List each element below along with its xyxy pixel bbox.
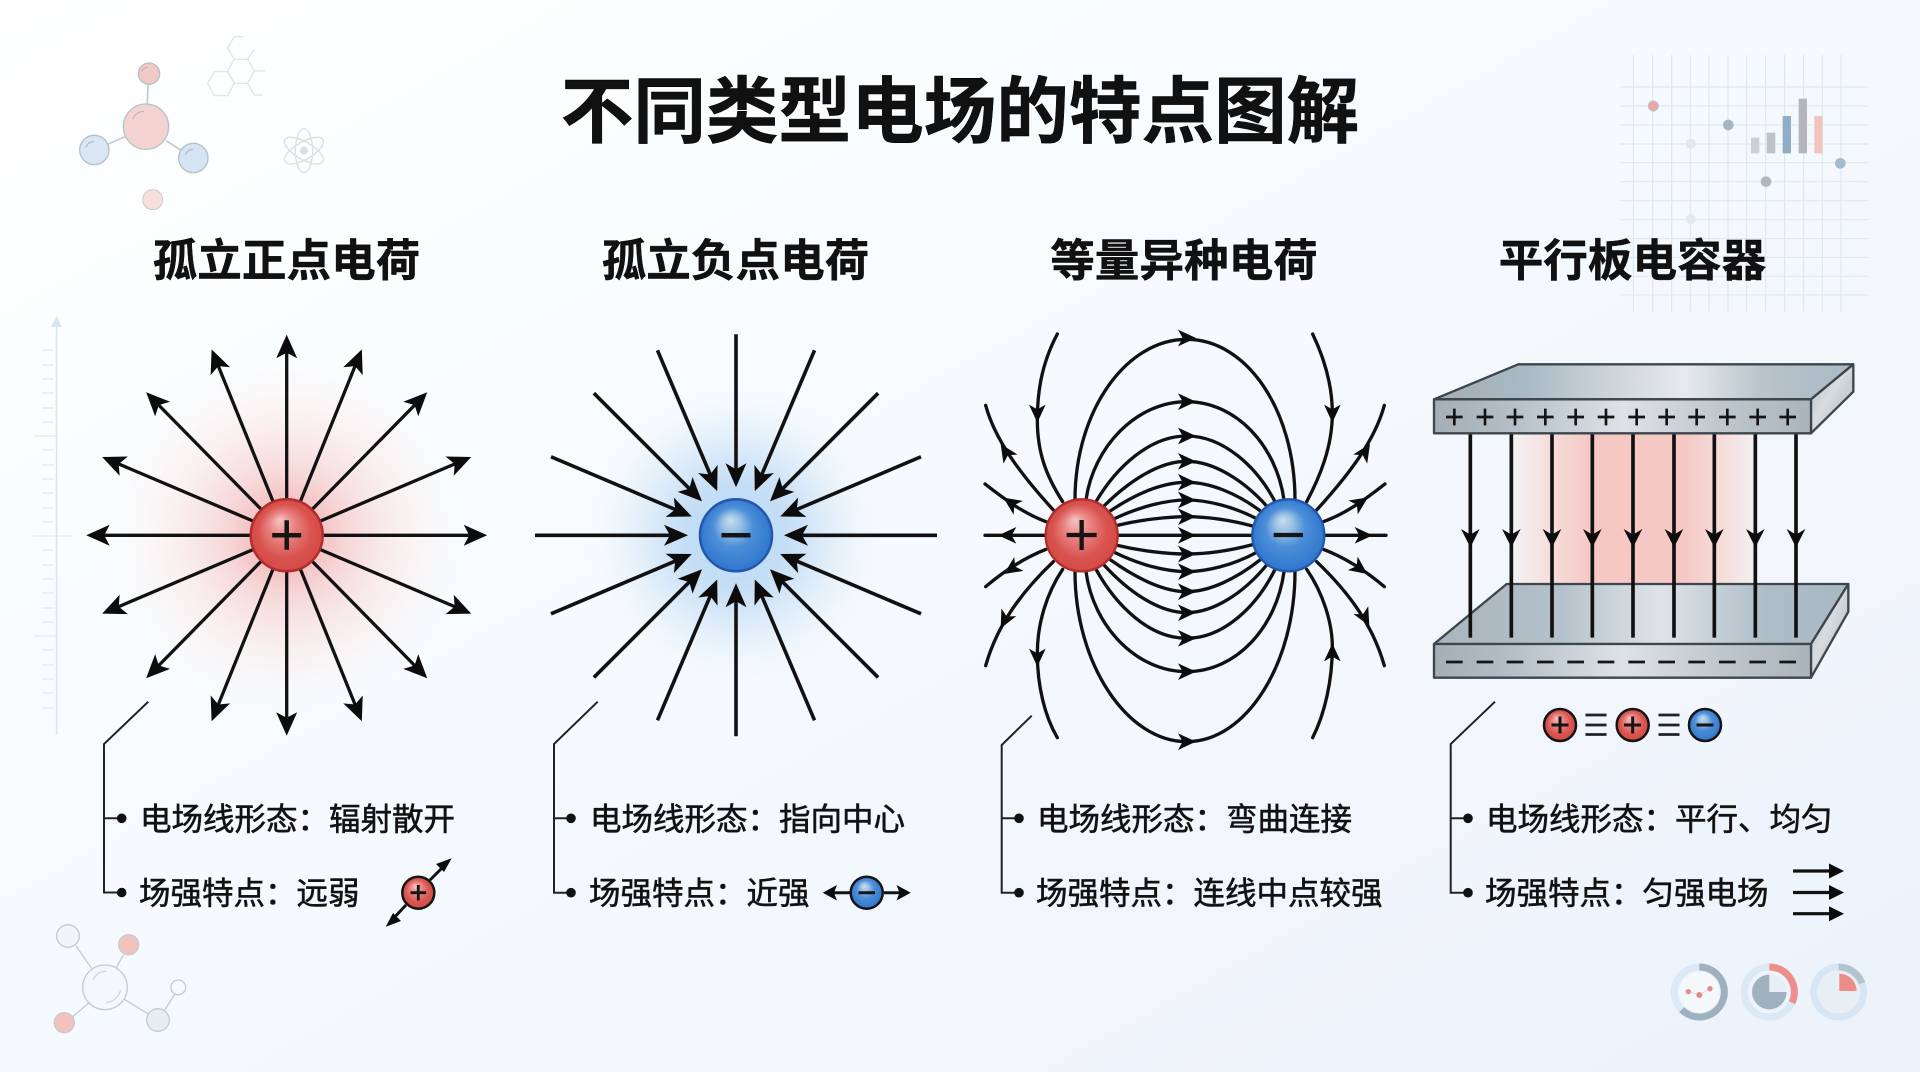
text: field strength: 场强特点：近强	[589, 875, 810, 911]
callout bracket	[104, 702, 148, 897]
text: field line shape: 电场线形态：弯曲连接	[1037, 801, 1352, 837]
text: field strength: 场强特点：连线中点较强	[1036, 875, 1383, 911]
panel: isolated negative charge	[535, 237, 937, 911]
decoration: atom icon	[281, 129, 327, 173]
heading: positive charge: 孤立正点电荷	[153, 237, 420, 286]
diagram: curved dipole field lines	[985, 330, 1386, 750]
decoration: grid with scatter points and bars	[1620, 55, 1868, 312]
text: field line shape: 电场线形态：平行、均匀	[1486, 801, 1833, 837]
title: 不同类型电场的特点图解	[561, 72, 1359, 153]
callout bracket	[1451, 702, 1495, 898]
heading: dipole: 等量异种电荷	[1050, 237, 1318, 286]
callout bracket	[554, 702, 598, 898]
panel: equal opposite charges	[985, 237, 1386, 911]
decoration: molecule top left	[80, 63, 208, 210]
heading: capacitor: 平行板电容器	[1499, 237, 1767, 286]
icon: positive charge with diverging arrows	[386, 858, 452, 927]
heading: negative charge: 孤立负点电荷	[602, 237, 869, 286]
decoration: three round gauges	[1674, 967, 1864, 1017]
text: field strength: 场强特点：远弱	[139, 875, 360, 911]
diagram: capacitor plates and uniform field	[1434, 364, 1853, 678]
decoration: left vertical axis	[33, 316, 72, 735]
panel: isolated positive charge	[86, 237, 487, 927]
text: field strength: 场强特点：匀强电场	[1485, 875, 1769, 911]
icon: charge equality row	[1544, 709, 1721, 741]
callout bracket	[1002, 716, 1032, 898]
diagram: radial outward field lines	[86, 335, 487, 736]
text: field line shape: 电场线形态：指向中心	[590, 801, 905, 837]
decoration: hexagon rings	[208, 37, 265, 96]
icon: three parallel arrows	[1793, 864, 1844, 921]
decoration: molecule bottom left	[54, 925, 186, 1033]
diagram: radial inward field lines	[535, 334, 937, 736]
text: field line shape: 电场线形态：辐射散开	[140, 801, 455, 837]
panel: parallel plate capacitor	[1434, 237, 1853, 921]
icon: negative charge with side arrows	[823, 877, 911, 909]
